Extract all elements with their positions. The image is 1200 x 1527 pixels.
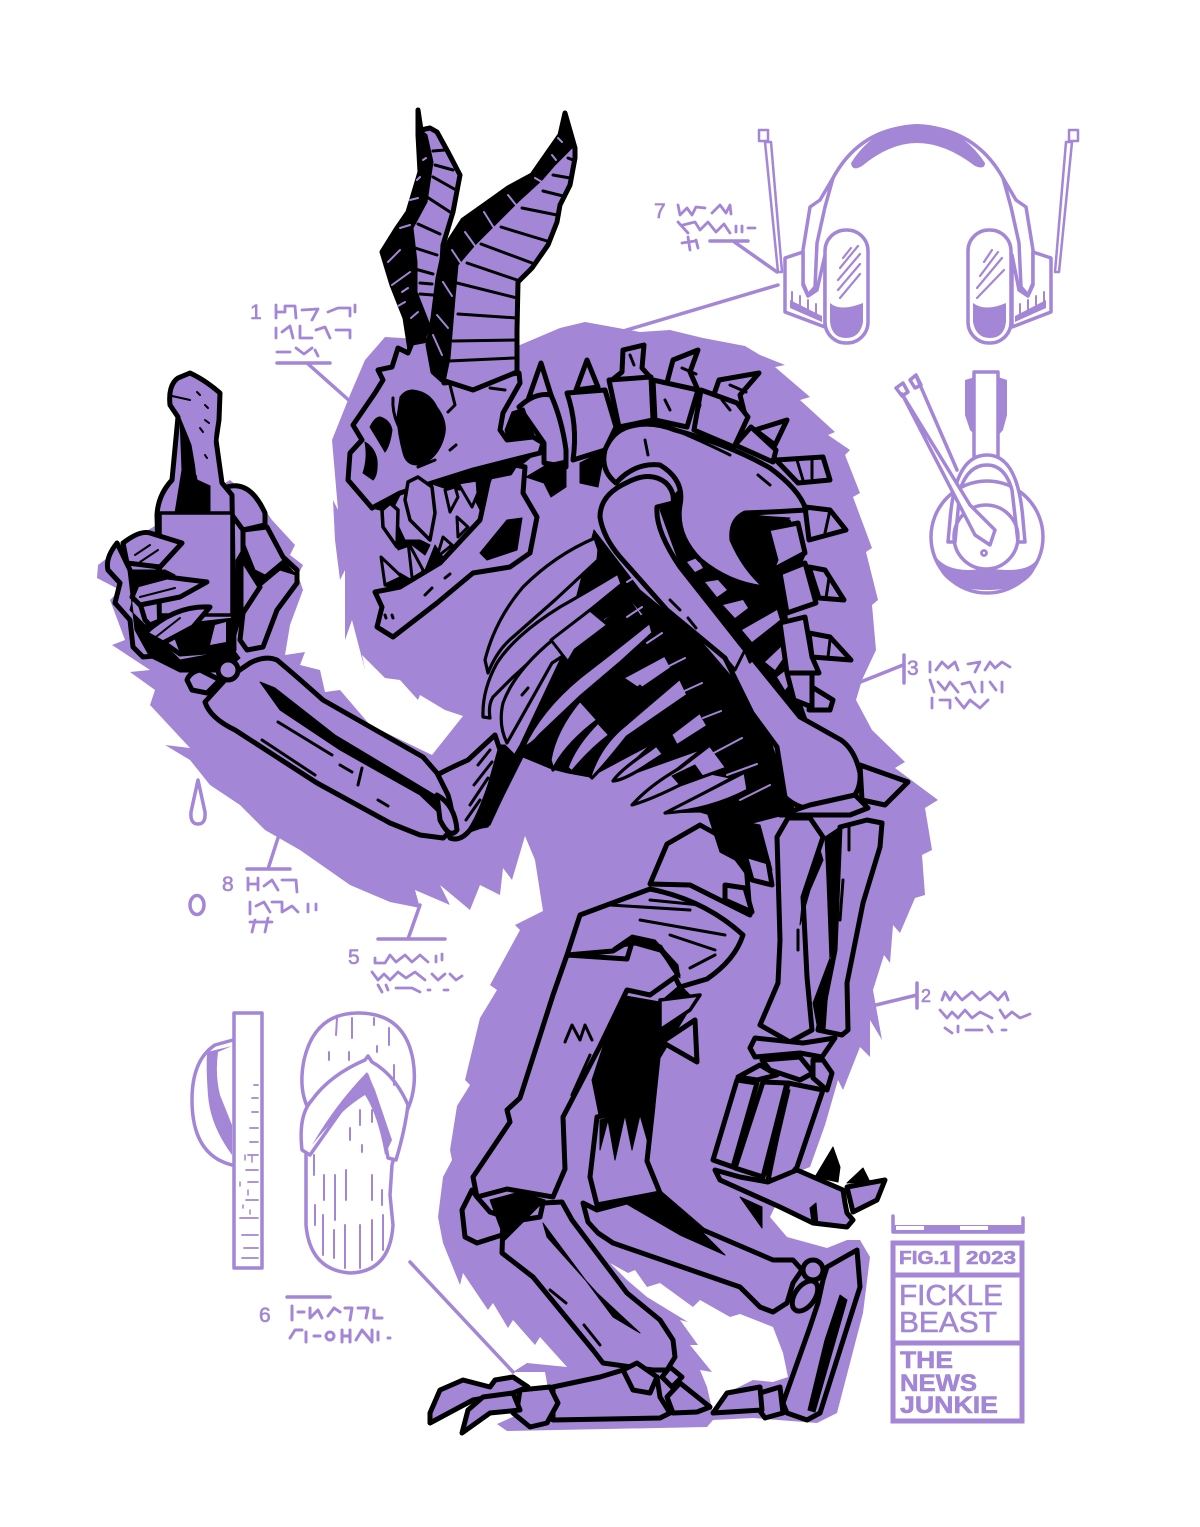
headphones front view: [759, 124, 1078, 343]
fingers and claws: [107, 532, 240, 693]
sacrum tail bones: [660, 995, 700, 1062]
THE: THE: [900, 1347, 953, 1374]
bottle: [157, 373, 234, 654]
forearm: [205, 658, 457, 838]
label 1: 1: [250, 301, 262, 324]
FIG.1: FIG.1: [899, 1248, 951, 1268]
ribcage background: [470, 530, 795, 830]
vertebra windows: [687, 558, 793, 690]
humerus crack: [670, 600, 768, 742]
rear femur: [590, 1105, 660, 1205]
leader line to fur from headphones: [610, 285, 778, 335]
label 3: [858, 655, 1010, 708]
rear foot: [713, 1250, 860, 1420]
scale bar: [893, 1216, 1023, 1232]
black band behind scapula: [660, 478, 810, 728]
upper arm joint: [437, 735, 520, 839]
right horn: [428, 113, 575, 390]
left horn: [382, 110, 460, 350]
label 2: 2: [921, 986, 931, 1006]
rear shin: [583, 1193, 823, 1316]
label 5: 5: [348, 946, 360, 969]
ribs: [483, 538, 770, 813]
front femur: [473, 935, 680, 1197]
front shin: [490, 1192, 675, 1370]
title block: [893, 1216, 1023, 1421]
lumbar spine: [650, 815, 772, 915]
label 6: [259, 1297, 390, 1342]
leader line to leg: [410, 1262, 513, 1372]
knee patella: [462, 1190, 505, 1243]
JUNKIE: JUNKIE: [900, 1392, 998, 1419]
back vertebrae with spikes: [762, 457, 851, 710]
label 8: 8: [222, 873, 234, 896]
teeth: [381, 477, 478, 585]
flip flop side view: [192, 1013, 262, 1268]
label 7: [654, 200, 777, 272]
label 6: 6: [259, 1304, 271, 1327]
block frame: [893, 1243, 1022, 1421]
2023: 2023: [966, 1248, 1016, 1268]
pelvis: [567, 889, 743, 987]
label 3: 3: [907, 657, 919, 680]
hanging hand: [713, 1038, 885, 1228]
jaw: [375, 465, 537, 637]
circle droplet: [190, 896, 204, 914]
skull: [348, 340, 543, 590]
label 7: 7: [654, 200, 666, 223]
label 2: [876, 983, 1030, 1033]
hand palm bones: [227, 486, 297, 650]
front foot: [430, 1363, 710, 1433]
black thigh shadow: [592, 985, 695, 1120]
NEWS: NEWS: [900, 1370, 977, 1397]
hanging forearm: [760, 765, 908, 1042]
drop: [191, 780, 205, 824]
fur silhouette: [97, 322, 938, 1431]
label 8: [222, 838, 316, 932]
headphones side view: [896, 372, 1043, 593]
label 5: [348, 905, 462, 992]
flip flop top view: [301, 1013, 414, 1273]
FICKLE: FICKLE: [899, 1280, 1003, 1312]
label 1: [250, 301, 355, 403]
scapula: [604, 424, 806, 588]
BEAST: BEAST: [899, 1307, 997, 1339]
humerus: [600, 476, 860, 810]
neck vertebrae with spines: [519, 345, 787, 497]
